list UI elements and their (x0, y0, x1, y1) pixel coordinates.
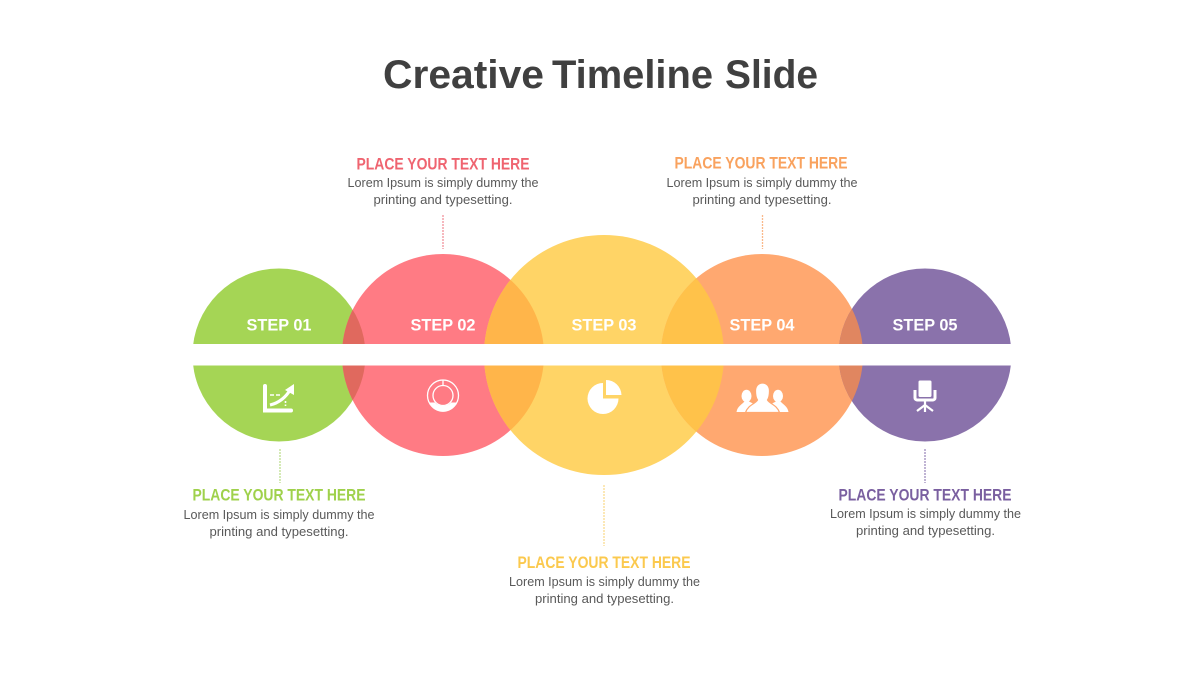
text block: step 3: Lorem Ipsum is simply dummy the (509, 575, 700, 589)
text block: step 4 (666, 154, 858, 207)
text block: step 3: printing and typesetting. (535, 592, 674, 606)
circle: step 2 (342, 254, 544, 456)
circle: step 4 (661, 254, 863, 456)
text block: step 2: PLACE YOUR TEXT HERE (356, 156, 530, 174)
title (383, 53, 818, 97)
text block: step 4: printing and typesetting. (692, 193, 832, 207)
step 3 label: STEP 03 (572, 316, 636, 334)
title: Slide (725, 53, 818, 97)
text block: step 1 (184, 486, 375, 539)
overlap: steps 4 and 5 (839, 309, 862, 401)
connector: step 3 (603, 485, 605, 546)
text block: step 2 (348, 156, 539, 207)
connector: step 2 (442, 215, 444, 249)
overlap: steps 3 and 4 (662, 278, 724, 432)
text block: step 1: printing and typesetting. (210, 525, 348, 539)
step 4 label: STEP 04 (730, 316, 795, 334)
text block: step 5: PLACE YOUR TEXT HERE (838, 486, 1012, 504)
circle: step 3 (484, 235, 724, 475)
title: Timeline (552, 53, 713, 97)
text block: step 5: printing and typesetting. (856, 524, 995, 538)
text block: step 5 (830, 486, 1021, 538)
text block: step 1: Lorem Ipsum is simply dummy the (184, 508, 375, 522)
overlap: steps 1 and 2 (342, 310, 365, 400)
step 2 label: STEP 02 (410, 316, 476, 334)
icon: pie chart (588, 380, 622, 414)
overlap: steps 2 and 3 (484, 280, 544, 430)
icon: people group (736, 383, 788, 412)
connector: step 1 (279, 449, 281, 483)
text block: step 4: Lorem Ipsum is simply dummy the (666, 176, 858, 190)
step 1 label: STEP 01 (246, 316, 312, 334)
white band (180, 344, 1020, 366)
icon: donut chart (428, 380, 458, 412)
text block: step 4: PLACE YOUR TEXT HERE (674, 154, 848, 172)
icon: growth chart (265, 384, 294, 410)
text block: step 3: PLACE YOUR TEXT HERE (518, 554, 690, 572)
connector: step 4 (762, 215, 764, 249)
text block: step 2: Lorem Ipsum is simply dummy the (348, 176, 539, 190)
icon: office chair (915, 380, 935, 412)
title: Creative (383, 53, 544, 97)
circle: step 5 (838, 268, 1012, 442)
text block: step 2: printing and typesetting. (374, 193, 512, 207)
text block: step 3 (509, 554, 700, 606)
circle: step 1 (192, 268, 366, 442)
text block: step 5: Lorem Ipsum is simply dummy the (830, 507, 1021, 521)
connector: step 5 (924, 449, 926, 483)
step 5 label: STEP 05 (892, 316, 958, 334)
text block: step 1: PLACE YOUR TEXT HERE (192, 486, 366, 504)
timeline circles (180, 235, 1020, 475)
step labels (246, 316, 958, 334)
